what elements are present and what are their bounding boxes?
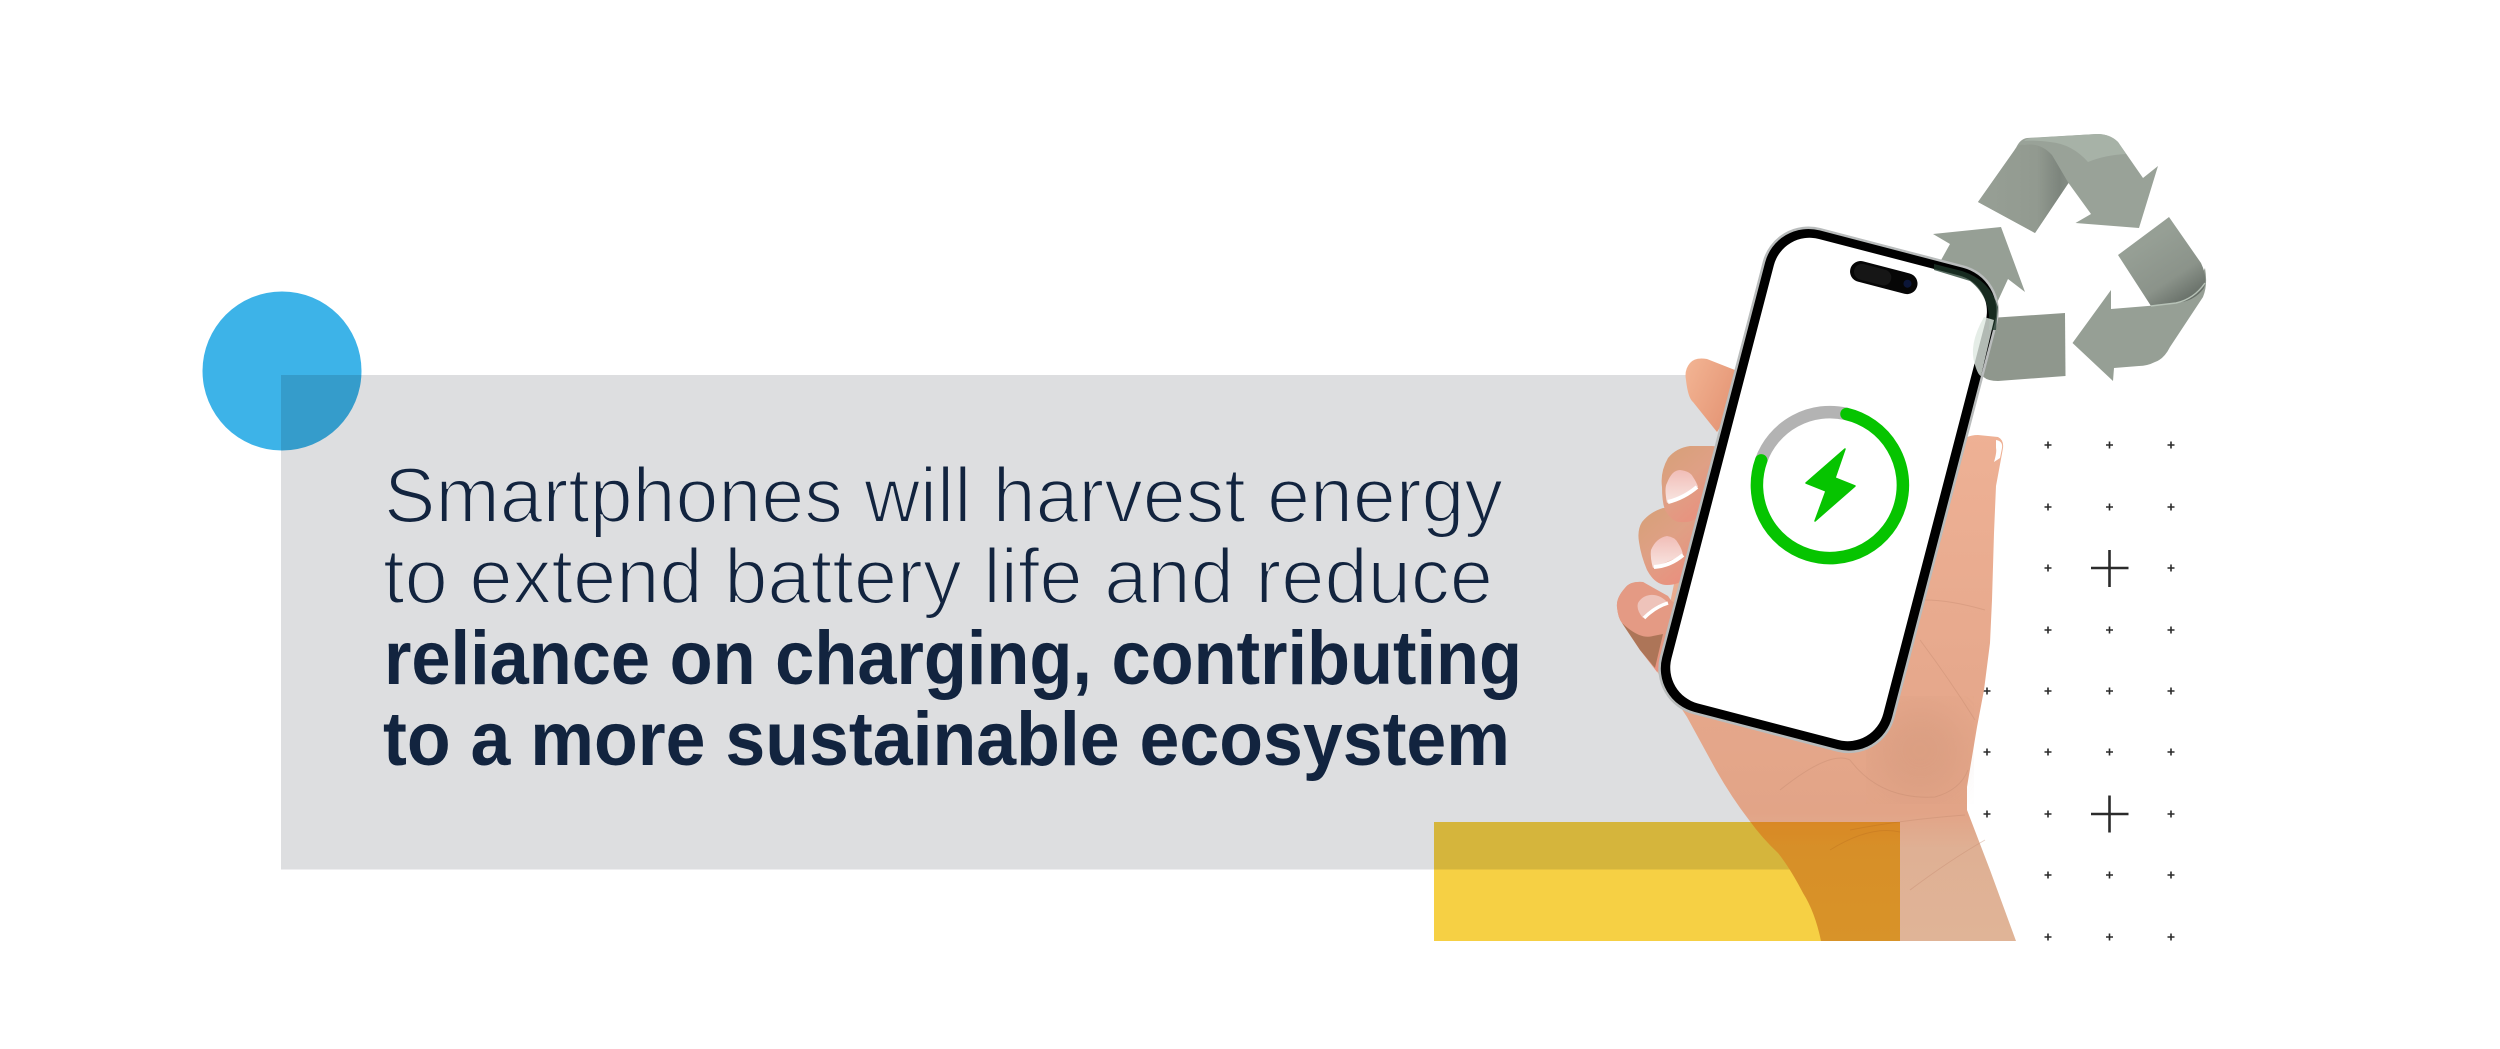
finger 1	[1686, 358, 1740, 432]
headline text: reliance on charging, contributing	[384, 616, 1522, 701]
top arrow	[1978, 134, 2158, 233]
fingernails	[1638, 440, 2002, 618]
finger 2	[1662, 446, 1722, 522]
plus-sign dot grid	[1984, 442, 2174, 940]
phone screen	[1662, 230, 1995, 749]
icon: lightning bolt	[1806, 449, 1855, 521]
headline text: to a more sustainable ecosystem	[383, 697, 1510, 782]
phone	[1649, 218, 2008, 762]
left arrow	[1980, 313, 2066, 381]
right arrow	[2072, 268, 2206, 381]
palm and wrist	[1656, 430, 2016, 941]
finger 4	[1617, 582, 1690, 672]
headline text: to extend battery life and reduce	[383, 532, 1493, 620]
yellow accent rectangle	[1434, 822, 1900, 941]
phone body	[1649, 218, 2008, 762]
shadow at palm	[1875, 705, 1965, 795]
panel: grey text background	[281, 375, 1792, 870]
headline text: Smartphones will harvest energy	[384, 451, 1503, 539]
tinted bezel overlap with recycling arrow	[1934, 264, 1998, 330]
icon: recycling arrows	[1930, 134, 2206, 381]
palm creases	[1780, 600, 1985, 890]
camera island	[1848, 259, 1920, 296]
blue circle accent	[202, 292, 362, 450]
hand holding phone	[1617, 358, 2016, 941]
finger 3	[1638, 508, 1700, 585]
charging ring	[1757, 412, 1903, 558]
headline text	[383, 451, 1522, 782]
